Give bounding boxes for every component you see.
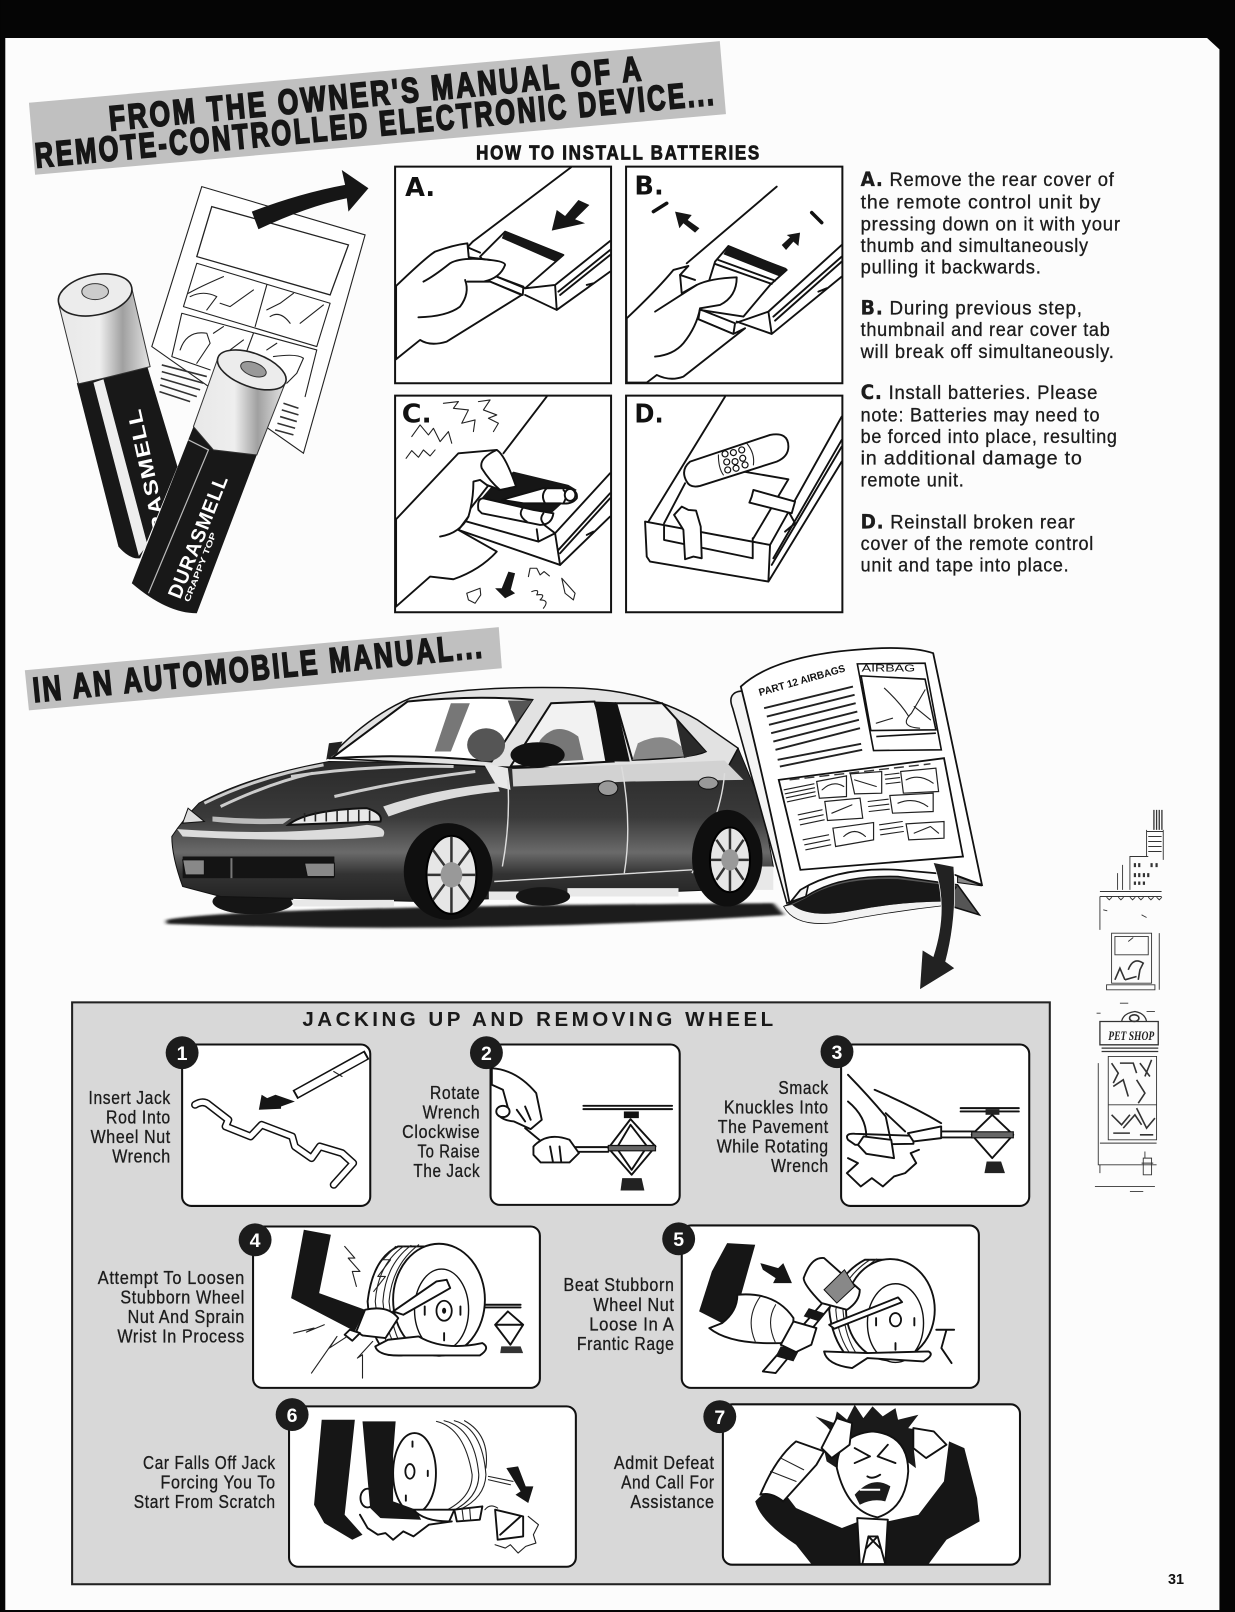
- step 6: [134, 1398, 576, 1567]
- icon: right battery: DURASMELL: [164, 472, 233, 602]
- step 4: Wrist In Process: [117, 1326, 245, 1347]
- step 7: And Call For: [621, 1472, 715, 1493]
- step 1: Wrench: [112, 1146, 171, 1167]
- step 3: 3: [832, 1042, 843, 1064]
- text: instructions A to D: in additional damage to: [861, 448, 1083, 470]
- text: instructions A to D: be forced into place, resulting: [861, 426, 1118, 448]
- step 5: Wheel Nut: [593, 1294, 675, 1315]
- illustration: batteries and manual sheet: [54, 170, 368, 613]
- step 2: [402, 1036, 680, 1205]
- step 3: Smack: [778, 1077, 829, 1098]
- text: instructions A to D: cover of the remote control: [861, 533, 1094, 555]
- panel D: taped cover: D.: [634, 399, 664, 429]
- step 3: Wrench: [771, 1155, 829, 1176]
- step 1: Rod Into: [106, 1107, 171, 1128]
- text: instructions A to D: thumb and simultaneously: [861, 235, 1089, 257]
- illustration: open manual: PART 12 AIRBAGS: [758, 664, 847, 699]
- step 7: 7: [714, 1407, 725, 1429]
- icon: left battery: DURASMELL: [123, 406, 181, 572]
- banner: automobile manual heading: IN AN AUTOMOBILE MANUAL...: [31, 626, 486, 710]
- step 2: Wrench: [423, 1102, 480, 1123]
- step 4: Attempt To Loosen: [98, 1267, 245, 1288]
- step 6: Car Falls Off Jack: [143, 1452, 276, 1473]
- side cartoon: street with pet shop: [1095, 810, 1163, 1191]
- page number: 31: [1168, 1572, 1184, 1588]
- illustration: car: [166, 688, 784, 928]
- step 6: Forcing You To: [161, 1472, 276, 1493]
- step 5: Loose In A: [589, 1313, 675, 1334]
- step 7: Admit Defeat: [614, 1452, 715, 1473]
- text: instructions A to D: [860, 168, 1121, 577]
- text: instructions A to D: thumbnail and rear cover tab: [861, 319, 1110, 341]
- step 4: Stubborn Wheel: [120, 1287, 245, 1308]
- text: instructions A to D: pulling it backwards.: [861, 256, 1042, 278]
- step 3: Knuckles Into: [724, 1096, 829, 1117]
- heading: how to install batteries: HOW TO INSTALL BATTERIES: [476, 141, 761, 164]
- side cartoon: street with pet shop: PET SHOP: [1108, 1029, 1154, 1043]
- step 5: Frantic Rage: [577, 1333, 675, 1354]
- arrow: from manual to steps: [920, 863, 955, 990]
- banner: owner's manual heading: REMOTE-CONTROLLED ELECTRONIC DEVICE...: [33, 74, 718, 176]
- step 6: 6: [287, 1405, 298, 1427]
- illustration: open manual: AIRBAG: [862, 663, 915, 674]
- step 2: Clockwise: [402, 1121, 480, 1142]
- step 2: Rotate: [430, 1082, 480, 1103]
- text: instructions A to D: will break off simultaneously.: [860, 341, 1115, 363]
- step 6: Start From Scratch: [134, 1491, 276, 1512]
- step 4: Nut And Sprain: [128, 1306, 245, 1327]
- step 7: [614, 1400, 1020, 1565]
- step 3: The Pavement: [718, 1116, 829, 1137]
- step 2: 2: [481, 1043, 492, 1065]
- panel C: forced batteries: [395, 396, 611, 612]
- icon: right battery: CRAPPY TOP: [182, 530, 219, 603]
- step 2: The Jack: [413, 1160, 480, 1181]
- text: instructions A to D: C. Install batteries. Please: [861, 381, 1098, 404]
- step 3: [717, 1035, 1029, 1206]
- step 1: [89, 1036, 370, 1206]
- arrow: from sheet to panels: [252, 170, 368, 229]
- text: instructions A to D: remote unit.: [861, 469, 964, 491]
- banner: owner's manual heading: FROM THE OWNER'S MANUAL OF A: [107, 49, 645, 139]
- panel A: remove cover: A.: [405, 173, 435, 203]
- text: instructions A to D: the remote control unit by: [861, 192, 1101, 214]
- step 7: Assistance: [630, 1491, 715, 1512]
- text: instructions A to D: D. Reinstall broken rear: [861, 510, 1076, 533]
- text: instructions A to D: B. During previous step,: [861, 297, 1083, 320]
- panel: jacking up steps: [72, 1002, 1050, 1584]
- step 1: 1: [177, 1043, 188, 1065]
- step 4: 4: [250, 1230, 261, 1252]
- step 3: While Rotating: [717, 1135, 829, 1156]
- banner: automobile manual heading: [25, 626, 502, 710]
- title: jacking up: JACKING UP AND REMOVING WHEEL: [302, 1008, 773, 1031]
- panel C: forced batteries: C.: [402, 399, 432, 429]
- panel A: remove cover: [395, 167, 611, 383]
- illustration: open manual: [731, 648, 982, 923]
- step 2: To Raise: [418, 1141, 480, 1162]
- text: instructions A to D: A. Remove the rear cover of: [861, 168, 1115, 191]
- text: instructions A to D: unit and tape into place.: [861, 555, 1069, 577]
- icon: right battery: [132, 342, 291, 613]
- panel B: thumbnail breaks: [626, 167, 842, 383]
- text: instructions A to D: note: Batteries may need to: [861, 405, 1100, 427]
- step 5: Beat Stubborn: [564, 1274, 675, 1295]
- step 1: Wheel Nut: [91, 1126, 171, 1147]
- step 5: [564, 1222, 979, 1388]
- step 5: 5: [673, 1229, 684, 1251]
- panel D: taped cover: [626, 396, 842, 612]
- text: instructions A to D: pressing down on it with your: [861, 213, 1121, 235]
- step 4: [98, 1223, 540, 1388]
- icon: left battery: [54, 268, 181, 572]
- panels: battery installation steps: [395, 167, 842, 612]
- step 1: Insert Jack: [89, 1087, 171, 1108]
- panel B: thumbnail breaks: B.: [634, 171, 664, 201]
- banner: owner's manual heading: [29, 41, 726, 176]
